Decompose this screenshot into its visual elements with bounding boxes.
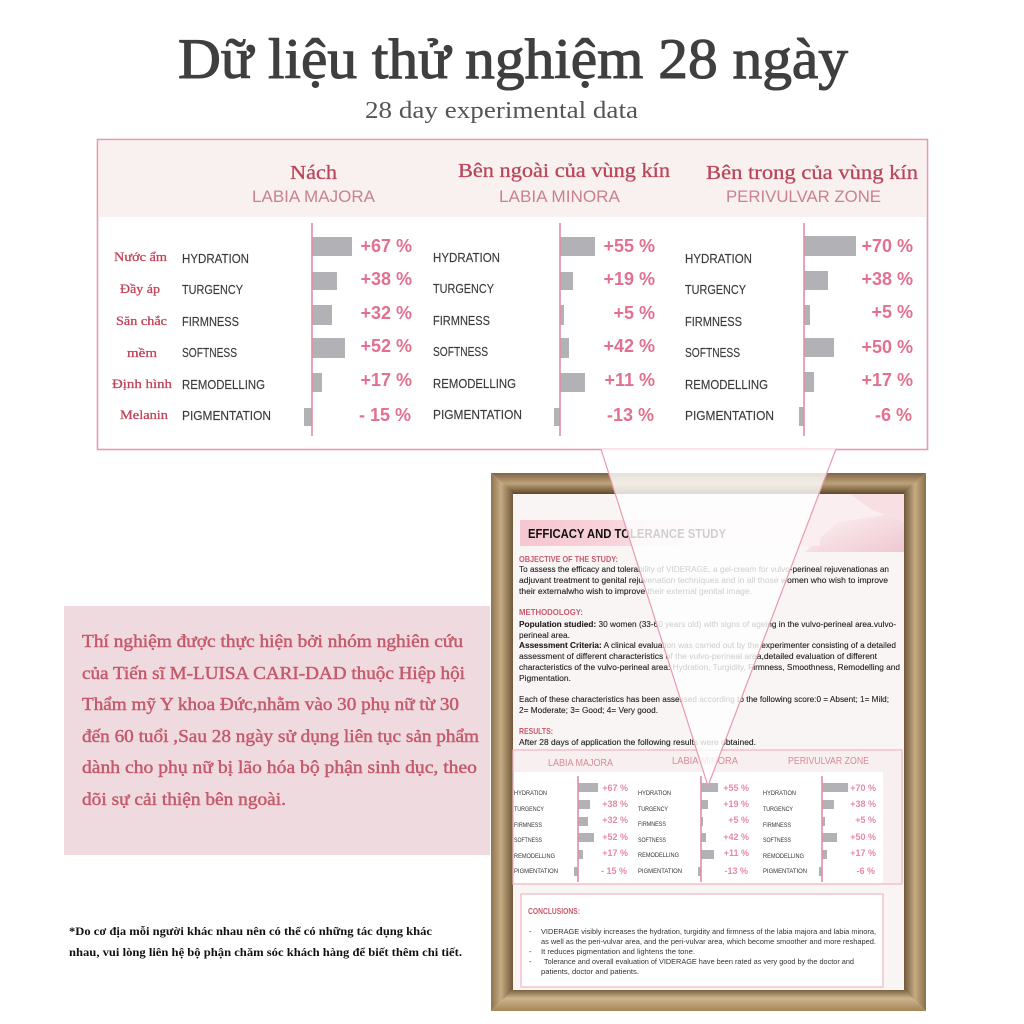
document section: methodology: perineal area. bbox=[519, 630, 570, 640]
chart: labia minora: REMODELLING bbox=[433, 377, 516, 391]
document section: methodology: Population studied: 30 women (33-60 years old) with signs of ageing in the vulvo-perineal area.vulvo- bbox=[519, 619, 896, 629]
chart: labia majora: +52 % bbox=[360, 336, 412, 356]
chart: labia majora: +17 % bbox=[360, 370, 412, 390]
panel: results comparison table bbox=[98, 140, 928, 450]
chart: perivulvar zone: FIRMNESS bbox=[685, 315, 742, 329]
document page background bbox=[513, 494, 904, 990]
miniature results table: LABIA MINORA bbox=[672, 756, 738, 767]
mini chart: perivulvar zone: SOFTNESS bbox=[763, 838, 791, 844]
document section: objective: adjuvant treatment to genital rejuvenation techniques and in all those women who wish to improve bbox=[519, 575, 888, 585]
column heading: perivulvar zone: PERIVULVAR ZONE bbox=[726, 187, 881, 206]
chart: labia minora: +42 % bbox=[603, 336, 655, 356]
mini chart: perivulvar zone: +38 % bbox=[850, 799, 876, 809]
panel: experiment description: đến 60 tuổi ,Sau 28 ngày sử dụng liên tục sản phẩm bbox=[82, 726, 479, 746]
chart: perivulvar zone: REMODELLING bbox=[685, 378, 768, 392]
chart: labia minora: FIRMNESS bbox=[433, 314, 490, 328]
document section: objective: their externalwho wish to improve their external genital image. bbox=[519, 586, 752, 596]
document section: methodology: characteristics of the vulvo-perineal area: Hydration, Turgidity, Firmness, Smoothness, Remodelling and bbox=[519, 662, 900, 672]
panel: experiment description: dành cho phụ nữ bị lão hóa bộ phận sinh dục, theo bbox=[82, 757, 477, 777]
document section: results bbox=[519, 726, 756, 747]
column heading: labia minora: Bên ngoài của vùng kín bbox=[458, 160, 670, 182]
mini chart: labia minora bbox=[638, 776, 749, 882]
conclusions box: VIDERAGE visibly increases the hydration, turgidity and firmness of the labia majora and labia minora, bbox=[541, 927, 876, 936]
chart: labia minora: -13 % bbox=[607, 405, 654, 425]
mini chart: perivulvar zone: +17 % bbox=[850, 848, 876, 858]
mini chart: labia majora: FIRMNESS bbox=[514, 823, 542, 829]
panel: experiment description: của Tiến sĩ M-LUISA CARI-DAD thuộc Hiệp hội bbox=[82, 663, 465, 683]
mini chart: labia minora: +55 % bbox=[723, 783, 749, 793]
footnote: nhau, vui lòng liên hệ bộ phận chăm sóc khách hàng để biết thêm chi tiết. bbox=[69, 945, 462, 959]
column heading: perivulvar zone: Bên trong của vùng kín bbox=[706, 162, 918, 184]
mini chart: perivulvar zone: +5 % bbox=[855, 815, 876, 825]
chart: perivulvar zone: +17 % bbox=[861, 370, 913, 390]
mini chart: labia majora: +52 % bbox=[602, 832, 628, 842]
row labels in Vietnamese: Nước ẩm bbox=[114, 249, 167, 264]
chart: labia minora: PIGMENTATION bbox=[433, 408, 522, 422]
chart: labia majora: PIGMENTATION bbox=[182, 409, 271, 423]
mini chart: perivulvar zone: TURGENCY bbox=[763, 807, 793, 813]
mini chart: labia minora: +19 % bbox=[723, 799, 749, 809]
chart: labia majora: FIRMNESS bbox=[182, 315, 239, 329]
document section: methodology: Pigmentation. bbox=[519, 673, 571, 683]
document section: methodology: METHODOLOGY: bbox=[519, 607, 583, 617]
chart: labia majora: TURGENCY bbox=[182, 283, 244, 297]
mini chart: labia minora: SOFTNESS bbox=[638, 838, 666, 844]
mini chart: labia minora: TURGENCY bbox=[638, 807, 668, 813]
framed study document bbox=[491, 473, 926, 1011]
mini chart: perivulvar zone: +70 % bbox=[850, 783, 876, 793]
document section: objective bbox=[519, 554, 889, 596]
document section: objective: OBJECTIVE OF THE STUDY: bbox=[519, 554, 618, 564]
panel: experiment description: Thí nghiệm được thực hiện bởi nhóm nghiên cứu bbox=[82, 631, 463, 651]
panel: experiment description: Thẩm mỹ Y khoa Đức,nhằm vào 30 phụ nữ từ 30 bbox=[82, 694, 459, 714]
column heading: labia minora bbox=[458, 160, 670, 206]
chart: perivulvar zone: +50 % bbox=[861, 337, 913, 357]
conclusions box: It reduces pigmentation and lightens the tone. bbox=[541, 947, 695, 956]
column heading: perivulvar zone bbox=[706, 162, 918, 206]
conclusions box: CONCLUSIONS: bbox=[528, 906, 580, 916]
mini chart: labia majora: +67 % bbox=[602, 783, 628, 793]
mini chart: labia majora: REMODELLING bbox=[514, 854, 555, 860]
mini chart: labia majora: HYDRATION bbox=[514, 791, 547, 797]
wooden frame bbox=[491, 473, 926, 1011]
mini chart: perivulvar zone: HYDRATION bbox=[763, 791, 796, 797]
miniature results table: PERIVULVAR ZONE bbox=[788, 756, 869, 767]
miniature results table bbox=[513, 750, 902, 884]
chart: labia minora: +11 % bbox=[604, 370, 655, 390]
mini chart: labia minora: +5 % bbox=[728, 815, 749, 825]
mini chart: labia majora: +38 % bbox=[602, 799, 628, 809]
panel: experiment description: dõi sự cải thiện bên ngoài. bbox=[82, 789, 286, 809]
mini chart: labia minora: PIGMENTATION bbox=[638, 869, 682, 875]
chart: labia minora bbox=[433, 223, 655, 436]
chart: labia majora: +32 % bbox=[360, 303, 412, 323]
column heading: labia majora: Nách bbox=[290, 162, 337, 184]
column heading: labia majora: LABIA MAJORA bbox=[252, 187, 376, 206]
chart: labia minora: +5 % bbox=[613, 303, 655, 323]
row labels in Vietnamese: Định hình bbox=[112, 376, 173, 391]
mini chart: labia minora: HYDRATION bbox=[638, 791, 671, 797]
mini chart: labia majora: PIGMENTATION bbox=[514, 869, 558, 875]
conclusions box: patients, doctor and patients. bbox=[541, 967, 639, 976]
row labels in Vietnamese: Đầy áp bbox=[120, 281, 160, 296]
row labels in Vietnamese: Săn chắc bbox=[116, 313, 167, 328]
chart: perivulvar zone: +70 % bbox=[861, 236, 913, 256]
footnote: *Do cơ địa mỗi người khác nhau nên có thể có những tác dụng khác bbox=[69, 924, 433, 938]
mini chart: labia minora: +11 % bbox=[724, 848, 749, 858]
chart: perivulvar zone: SOFTNESS bbox=[685, 346, 740, 360]
column heading: labia majora bbox=[252, 162, 376, 206]
chart: labia minora: SOFTNESS bbox=[433, 345, 488, 359]
panel: experiment description bbox=[64, 606, 490, 855]
chart: perivulvar zone: -6 % bbox=[875, 405, 912, 425]
conclusions box: - bbox=[529, 947, 532, 956]
conclusions box: - bbox=[529, 927, 532, 936]
chart: labia majora: SOFTNESS bbox=[182, 346, 237, 360]
document section: methodology: Each of these characteristics has been assessed according to the following score:0 = Absent; 1= Mild; bbox=[519, 694, 889, 704]
mini chart: labia minora: REMODELLING bbox=[638, 853, 679, 859]
document heading band bbox=[520, 520, 820, 546]
chart: perivulvar zone bbox=[685, 223, 913, 436]
document section: methodology: Assessment Criteria: A clinical evaluation was carried out by the experimenter consisting of a detailed bbox=[519, 640, 896, 650]
chart: labia minora: +55 % bbox=[603, 236, 655, 256]
document section: objective: To assess the efficacy and tolerability of VIDERAGE, a gel-cream for vulvo-perineal rejuvenationas an bbox=[519, 564, 889, 574]
mini chart: labia majora: SOFTNESS bbox=[514, 838, 542, 844]
row labels in Vietnamese bbox=[112, 249, 173, 422]
mini chart: perivulvar zone: -6 % bbox=[856, 866, 875, 876]
chart: labia minora: HYDRATION bbox=[433, 251, 500, 265]
callout: magnifier wedge from table to document bbox=[601, 449, 836, 786]
mini chart: labia majora: +17 % bbox=[602, 848, 628, 858]
mini chart: perivulvar zone: PIGMENTATION bbox=[763, 869, 807, 875]
chart: labia majora bbox=[182, 223, 412, 436]
conclusions box: Tolerance and overall evaluation of VIDERAGE have been rated as very good by the doctor and bbox=[544, 957, 854, 966]
document section: results: RESULTS: bbox=[519, 726, 553, 736]
mini chart: labia minora: -13 % bbox=[724, 866, 748, 876]
row labels in Vietnamese: Melanin bbox=[120, 407, 169, 422]
chart: labia majora: REMODELLING bbox=[182, 378, 265, 392]
mini chart: labia majora: +32 % bbox=[602, 815, 628, 825]
chart: perivulvar zone: +5 % bbox=[871, 302, 913, 322]
mini chart: labia majora bbox=[514, 776, 628, 882]
mini chart: perivulvar zone: REMODELLING bbox=[763, 854, 804, 860]
chart: labia majora: - 15 % bbox=[359, 405, 411, 425]
chart: labia minora: TURGENCY bbox=[433, 282, 495, 296]
document section: methodology: 2= Moderate; 3= Good; 4= Very good. bbox=[519, 705, 658, 715]
conclusions box bbox=[521, 894, 883, 987]
title: Dữ liệu thử nghiệm 28 ngày bbox=[178, 28, 849, 91]
chart: labia minora: +19 % bbox=[603, 269, 655, 289]
document section: results: After 28 days of application the following results were obtained. bbox=[519, 737, 756, 747]
chart: perivulvar zone: HYDRATION bbox=[685, 252, 752, 266]
document heading band: EFFICACY AND TOLERANCE STUDY bbox=[528, 527, 727, 541]
chart: labia majora: +38 % bbox=[360, 269, 412, 289]
mini chart: labia majora: - 15 % bbox=[601, 866, 627, 876]
subtitle: 28 day experimental data bbox=[365, 98, 638, 124]
chart: perivulvar zone: TURGENCY bbox=[685, 283, 747, 297]
footnote bbox=[69, 924, 462, 959]
chart: labia majora: +67 % bbox=[360, 236, 412, 256]
mini chart: perivulvar zone: FIRMNESS bbox=[763, 823, 791, 829]
mini chart: labia minora: FIRMNESS bbox=[638, 822, 666, 828]
column heading: labia minora: LABIA MINORA bbox=[499, 187, 621, 206]
chart: perivulvar zone: +38 % bbox=[861, 269, 913, 289]
mini chart: perivulvar zone bbox=[763, 776, 876, 882]
conclusions box: as well as the peri-vulvar area, and the peri-vulvar area, which become smoother and more reshaped. bbox=[541, 937, 876, 946]
row labels in Vietnamese: mềm bbox=[127, 345, 157, 360]
mini chart: labia majora: TURGENCY bbox=[514, 807, 544, 813]
document section: methodology: assessment of different characteristics of the vulvo-perineal area,detailed evaluation of different bbox=[519, 651, 878, 661]
mini chart: labia minora: +42 % bbox=[723, 832, 749, 842]
conclusions box: - bbox=[529, 957, 532, 966]
mini chart: perivulvar zone: +50 % bbox=[850, 832, 876, 842]
chart: perivulvar zone: PIGMENTATION bbox=[685, 409, 774, 423]
chart: labia majora: HYDRATION bbox=[182, 252, 249, 266]
document section: methodology bbox=[519, 607, 900, 715]
miniature results table: LABIA MAJORA bbox=[548, 758, 613, 769]
